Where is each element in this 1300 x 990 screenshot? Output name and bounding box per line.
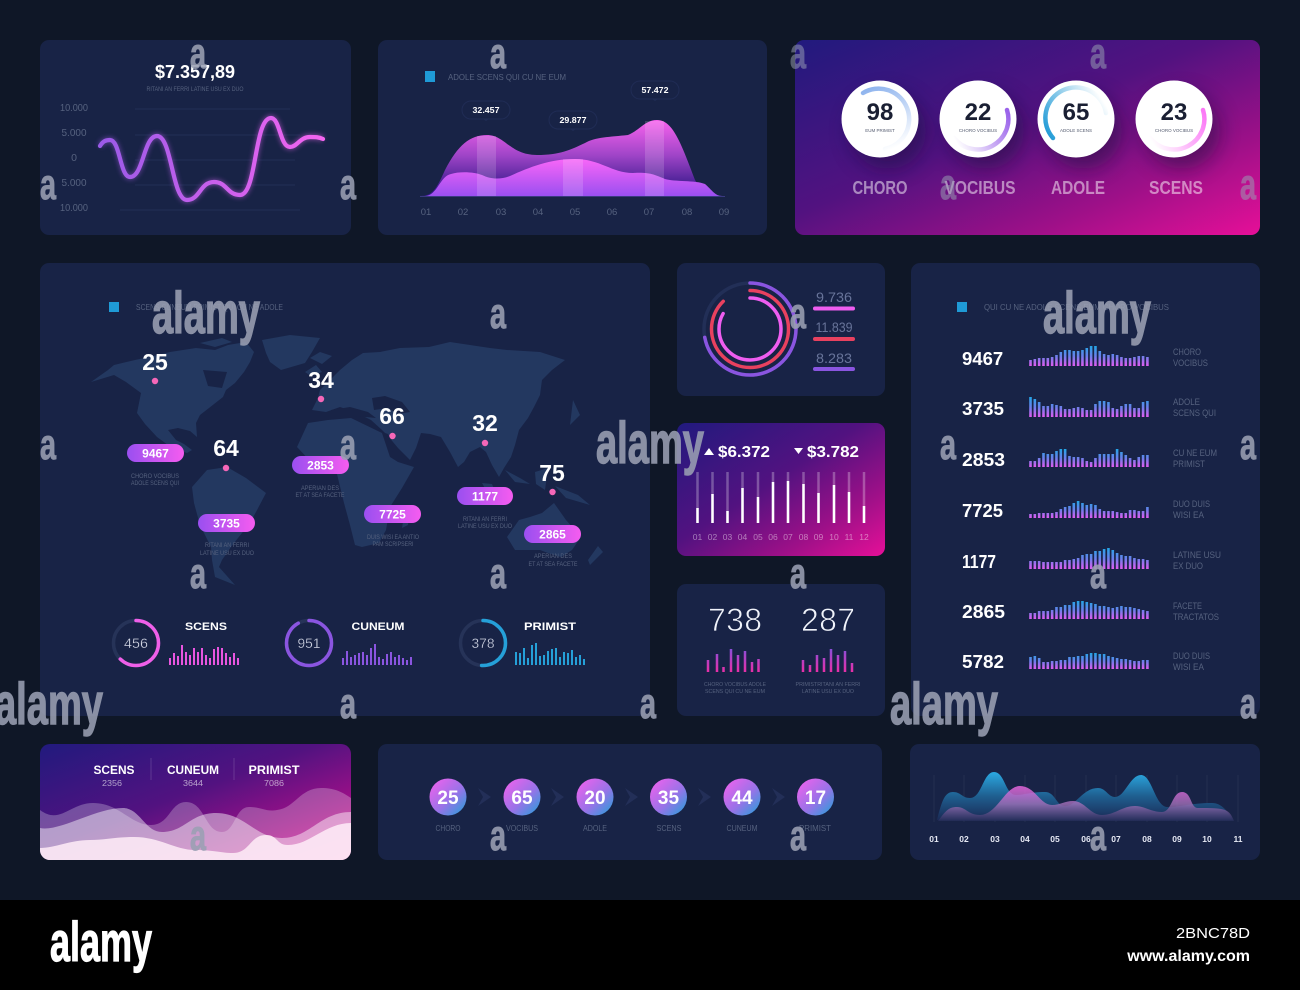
month labels: 12 bbox=[859, 532, 869, 542]
gauge titles: ADOLE bbox=[1051, 178, 1105, 198]
step 44: CUNEUM bbox=[726, 824, 758, 833]
step 65 bbox=[504, 778, 540, 833]
value 11.839 bbox=[813, 319, 855, 341]
row 2865: 2865 bbox=[962, 601, 1005, 622]
month labels bbox=[693, 532, 869, 542]
watermark overlay: a bbox=[790, 550, 807, 598]
row 7725 bbox=[962, 499, 1210, 521]
rings bbox=[704, 283, 796, 375]
axis labels: 11 bbox=[1234, 834, 1243, 844]
gauge: 22: 22 bbox=[965, 99, 991, 126]
watermark overlay: a bbox=[640, 680, 657, 728]
step 17: 17 bbox=[805, 788, 826, 809]
step 65: 65 bbox=[511, 788, 533, 809]
row 1177: LATINE USU bbox=[1173, 550, 1221, 560]
gauge: 98 bbox=[842, 80, 918, 158]
x axis labels bbox=[421, 207, 729, 218]
pill 7725: PAM SCRIPSERI bbox=[372, 542, 414, 548]
stat scens: 2356 bbox=[102, 778, 122, 788]
row 2853: 2853 bbox=[962, 449, 1005, 470]
stat primist: PRIMIST bbox=[248, 765, 300, 777]
stat scens: SCENS bbox=[94, 765, 135, 777]
step 25: CHORO bbox=[436, 824, 460, 833]
month labels: 03 bbox=[723, 532, 732, 542]
pill 1177 bbox=[457, 487, 513, 530]
gauge titles: SCENS bbox=[1149, 178, 1203, 198]
y axis labels bbox=[60, 102, 88, 214]
y axis labels: 10.000 bbox=[60, 202, 88, 214]
stat: scens: SCENS bbox=[185, 621, 227, 633]
axis labels: 10 bbox=[1202, 834, 1212, 844]
watermark overlay: alamy bbox=[152, 281, 260, 346]
axis labels: 06 bbox=[1081, 834, 1091, 844]
balance value: $7.357,89 bbox=[155, 62, 235, 82]
step 20 bbox=[576, 778, 614, 833]
month labels: 11 bbox=[845, 532, 854, 542]
row 9467: VOCIBUS bbox=[1173, 358, 1208, 368]
row 7725: WISI EA bbox=[1173, 510, 1204, 520]
legend: ADOLE SCENS QUI CU NE EUM bbox=[448, 72, 566, 82]
world map bbox=[91, 335, 603, 585]
x axis labels: 02 bbox=[458, 207, 468, 218]
watermark overlay: a bbox=[490, 812, 507, 860]
marker 34: 34 bbox=[308, 367, 334, 393]
axis labels bbox=[929, 834, 1243, 844]
value 8.283: 8.283 bbox=[816, 350, 852, 366]
axis labels: 04 bbox=[1020, 834, 1030, 844]
pill 2853 bbox=[292, 456, 349, 499]
stat: primist bbox=[460, 620, 584, 666]
pink hills bbox=[938, 786, 1234, 821]
back area bbox=[420, 120, 725, 196]
watermark overlay: a bbox=[190, 812, 207, 860]
stat: cuneum bbox=[286, 620, 411, 666]
panel: two counters bbox=[677, 584, 885, 716]
gauge shadows bbox=[850, 93, 1220, 169]
row 2865: TRACTATOS bbox=[1173, 612, 1219, 622]
blue hills bbox=[937, 772, 1233, 820]
gauge: 23: 23 bbox=[1161, 99, 1187, 126]
watermark overlay: alamy bbox=[596, 411, 704, 476]
pill 3735: LATINE USU EX DUO bbox=[200, 551, 254, 557]
x axis labels: 05 bbox=[570, 207, 580, 218]
footer band bbox=[0, 900, 1300, 990]
pill 9467: ADOLE SCENS QUI bbox=[131, 481, 179, 487]
callout 29.877 bbox=[549, 111, 597, 131]
gauge titles bbox=[852, 178, 1203, 198]
legend: QUI CU NE ADOLE SCENS EUM CHORO VOCIBUS bbox=[984, 302, 1169, 312]
wave line glow bbox=[100, 118, 323, 200]
stat: cuneum: CUNEUM bbox=[352, 621, 404, 633]
bar values bbox=[698, 481, 864, 523]
watermark overlay: a bbox=[790, 812, 807, 860]
row 3735: SCENS QUI bbox=[1173, 408, 1216, 418]
y axis labels: 0 bbox=[71, 152, 77, 164]
watermark overlay: a bbox=[790, 290, 807, 338]
step 44 bbox=[724, 778, 760, 833]
marker 64: 64 bbox=[213, 435, 239, 461]
y axis labels: 10.000 bbox=[60, 102, 88, 114]
pill 2865 bbox=[524, 525, 581, 568]
month labels: 05 bbox=[753, 532, 763, 542]
row 7725: DUO DUIS bbox=[1173, 499, 1210, 509]
x axis labels: 09 bbox=[719, 207, 729, 218]
down value: $3.782 bbox=[807, 444, 859, 461]
legend: SCENS CUNEUM PRIMIST QUI CU NE ADOLE bbox=[136, 302, 283, 312]
row 3735: ADOLE bbox=[1173, 397, 1200, 407]
step 35: 35 bbox=[658, 788, 679, 809]
month labels: 06 bbox=[768, 532, 778, 542]
gauge: 65 bbox=[1038, 80, 1114, 158]
watermark overlay: a bbox=[1090, 550, 1107, 598]
callout 32.457: 32.457 bbox=[472, 105, 500, 115]
watermark overlay: a bbox=[190, 550, 207, 598]
gauge: 65: ADOLE SCENS bbox=[1060, 128, 1092, 133]
marker 66: 66 bbox=[379, 403, 405, 429]
watermark overlay: a bbox=[1090, 30, 1107, 78]
month labels: 02 bbox=[708, 532, 717, 542]
month labels: 09 bbox=[814, 532, 823, 542]
watermark overlay: a bbox=[1240, 161, 1257, 209]
step 65: VOCIBUS bbox=[506, 824, 538, 833]
pill 2865: 2865 bbox=[539, 528, 566, 542]
marker 32: 32 bbox=[472, 410, 498, 436]
callout 57.472: 57.472 bbox=[642, 85, 669, 95]
pill 7725: 7725 bbox=[379, 508, 406, 522]
panel: gradient bar chart bbox=[677, 423, 885, 556]
gauge: 23: CHORO VOCIBUS bbox=[1155, 128, 1193, 133]
watermark overlay: a bbox=[940, 161, 957, 209]
row 7725: 7725 bbox=[962, 500, 1003, 521]
gauge: 22: CHORO VOCIBUS bbox=[959, 128, 997, 133]
stat primist bbox=[248, 765, 300, 788]
row 5782: WISI EA bbox=[1173, 662, 1204, 672]
pill 2853: ET AT SEA FACETE bbox=[296, 493, 344, 499]
chevrons bbox=[478, 788, 785, 806]
panel: world map bbox=[40, 263, 650, 716]
month labels: 01 bbox=[693, 532, 702, 542]
panel: balance line chart bbox=[40, 40, 351, 235]
panel: sparkline rows bbox=[911, 263, 1260, 716]
pill 7725: DUIS WISI EA ANTIO bbox=[367, 535, 419, 541]
gauge: 98: EUM PRIMIST bbox=[865, 128, 895, 133]
panel: gradient waves bbox=[40, 744, 351, 860]
balance caption: RITANI AN FERRI LATINE USU EX DUO bbox=[146, 87, 244, 93]
month labels: 07 bbox=[783, 532, 793, 542]
callout 57.472 bbox=[631, 81, 679, 101]
row 1177: EX DUO bbox=[1173, 561, 1203, 571]
value 8.283 bbox=[813, 350, 855, 371]
axis labels: 09 bbox=[1172, 834, 1182, 844]
row 2853: CU NE EUM bbox=[1173, 448, 1217, 458]
pill 7725 bbox=[364, 505, 421, 548]
wave line bbox=[100, 118, 323, 200]
watermark overlay: a bbox=[190, 30, 207, 78]
step 20: ADOLE bbox=[583, 824, 607, 833]
pill 2853: APERIAN DES bbox=[301, 486, 339, 492]
callout 29.877: 29.877 bbox=[560, 115, 587, 125]
stat: primist: 378 bbox=[472, 635, 495, 651]
pill 1177: 1177 bbox=[472, 490, 498, 504]
x axis labels: 03 bbox=[496, 207, 506, 218]
stat cuneum bbox=[167, 765, 219, 788]
row 1177 bbox=[962, 548, 1221, 572]
footer logo: alamy bbox=[50, 910, 152, 973]
gauge titles: VOCIBUS bbox=[944, 178, 1016, 198]
watermark overlay: a bbox=[790, 30, 807, 78]
y axis labels: 5.000 bbox=[62, 177, 87, 189]
pill 2865: APERIAN DES bbox=[534, 554, 572, 560]
axis labels: 03 bbox=[990, 834, 1000, 844]
watermark overlay: a bbox=[490, 550, 507, 598]
row 9467: 9467 bbox=[962, 348, 1003, 369]
pill 3735: RITANI AN FERRI bbox=[205, 543, 249, 549]
step 35 bbox=[650, 778, 687, 833]
pill 1177: LATINE USU EX DUO bbox=[458, 524, 512, 530]
stat: primist: PRIMIST bbox=[524, 621, 576, 633]
gauge: 22 bbox=[940, 80, 1016, 158]
row 3735: 3735 bbox=[962, 398, 1004, 419]
pill 2865: ET AT SEA FACETE bbox=[528, 562, 578, 568]
row 2865 bbox=[962, 601, 1219, 622]
counter 287: 287 bbox=[801, 602, 855, 638]
value 11.839: 11.839 bbox=[816, 319, 853, 335]
month labels: 04 bbox=[738, 532, 747, 542]
watermark overlay: alamy bbox=[890, 672, 998, 737]
site url: www.alamy.com bbox=[1126, 948, 1250, 965]
row 2853 bbox=[962, 448, 1217, 470]
pill 9467: 9467 bbox=[142, 446, 169, 460]
counter 738: SCENS QUI CU NE EUM bbox=[705, 689, 765, 695]
step 44: 44 bbox=[731, 788, 753, 809]
callout 32.457 bbox=[462, 101, 510, 121]
x axis labels: 07 bbox=[644, 207, 654, 218]
step 20: 20 bbox=[584, 788, 606, 809]
x axis labels: 06 bbox=[607, 207, 617, 218]
bar tracks bbox=[698, 472, 864, 523]
counter 287 bbox=[796, 602, 861, 695]
watermark overlay: a bbox=[40, 421, 57, 469]
watermark overlay: a bbox=[40, 161, 57, 209]
row 5782: DUO DUIS bbox=[1173, 651, 1210, 661]
axis labels: 07 bbox=[1111, 834, 1121, 844]
x axis labels: 01 bbox=[421, 207, 431, 218]
stat primist: 7086 bbox=[264, 778, 284, 788]
stat: cuneum: 951 bbox=[298, 635, 321, 651]
pill 9467 bbox=[127, 444, 184, 487]
axis labels: 02 bbox=[959, 834, 969, 844]
marker 25: 25 bbox=[142, 349, 168, 375]
marker 75: 75 bbox=[539, 460, 565, 486]
stat scens bbox=[94, 765, 135, 788]
counter 738: CHORO VOCIBUS ADOLE bbox=[704, 682, 766, 688]
watermark overlay: a bbox=[1240, 421, 1257, 469]
watermark overlay: a bbox=[340, 421, 357, 469]
row 9467: CHORO bbox=[1173, 347, 1201, 357]
watermark overlay: a bbox=[490, 290, 507, 338]
pill 3735 bbox=[198, 514, 255, 557]
step 35: SCENS bbox=[656, 824, 682, 833]
pill 3735: 3735 bbox=[213, 516, 240, 530]
stat cuneum: 3644 bbox=[183, 778, 203, 788]
panel: gauges bbox=[795, 40, 1260, 235]
value 9.736: 9.736 bbox=[816, 289, 852, 305]
stat cuneum: CUNEUM bbox=[167, 765, 219, 777]
gauge titles: CHORO bbox=[852, 178, 908, 198]
row 5782 bbox=[962, 651, 1210, 672]
map seas bbox=[203, 370, 410, 458]
counter 738 bbox=[704, 602, 766, 695]
gauge: 23 bbox=[1136, 80, 1212, 158]
pill 2853: 2853 bbox=[307, 458, 334, 472]
panel: area chart bbox=[378, 40, 767, 235]
up value: $6.372 bbox=[718, 444, 770, 461]
stat: scens bbox=[114, 620, 238, 666]
watermark overlay: a bbox=[1240, 680, 1257, 728]
highlight columns bbox=[477, 121, 664, 196]
step 25 bbox=[430, 778, 466, 833]
counter 738: 738 bbox=[708, 602, 762, 638]
month labels: 08 bbox=[799, 532, 808, 542]
row 2865: FACETE bbox=[1173, 601, 1202, 611]
watermark overlay: a bbox=[940, 421, 957, 469]
counter 287: PRIMISTRITANI AN FERRI bbox=[796, 682, 861, 688]
row 3735 bbox=[962, 397, 1216, 419]
axis labels: 01 bbox=[929, 834, 939, 844]
x axis labels: 04 bbox=[533, 207, 543, 218]
watermark overlay: a bbox=[340, 680, 357, 728]
watermark overlay: a bbox=[1090, 812, 1107, 860]
panel: concentric rings bbox=[677, 263, 885, 396]
x axis labels: 08 bbox=[682, 207, 692, 218]
pill 9467: CHORO VOCIBUS bbox=[131, 474, 179, 480]
step 17 bbox=[797, 778, 834, 833]
row 2853: PRIMIST bbox=[1173, 459, 1205, 469]
axis labels: 05 bbox=[1050, 834, 1060, 844]
watermark overlay: alamy bbox=[1043, 281, 1151, 346]
panel: step flow bbox=[378, 744, 882, 860]
y axis labels: 5.000 bbox=[62, 127, 87, 139]
value 9.736 bbox=[813, 289, 855, 310]
gauge: 98: 98 bbox=[867, 99, 893, 126]
wave layers bbox=[40, 788, 351, 860]
stat: scens: 456 bbox=[124, 635, 148, 651]
watermark overlay: a bbox=[490, 30, 507, 78]
pill 1177: RITANI AN FERRI bbox=[463, 517, 507, 523]
step 17: PRIMIST bbox=[799, 824, 831, 833]
row 1177: 1177 bbox=[962, 551, 996, 572]
counter 287: LATINE USU EX DUO bbox=[802, 689, 855, 695]
watermark overlay: a bbox=[340, 161, 357, 209]
row 5782: 5782 bbox=[962, 651, 1004, 672]
row 9467 bbox=[962, 346, 1208, 369]
gauge: 65: 65 bbox=[1063, 99, 1089, 126]
month labels: 10 bbox=[829, 532, 839, 542]
panel: hills chart bbox=[910, 744, 1260, 860]
axis labels: 08 bbox=[1142, 834, 1152, 844]
step 25: 25 bbox=[437, 788, 459, 809]
image id: 2BNC78D bbox=[1176, 925, 1250, 942]
front area bbox=[425, 159, 722, 196]
